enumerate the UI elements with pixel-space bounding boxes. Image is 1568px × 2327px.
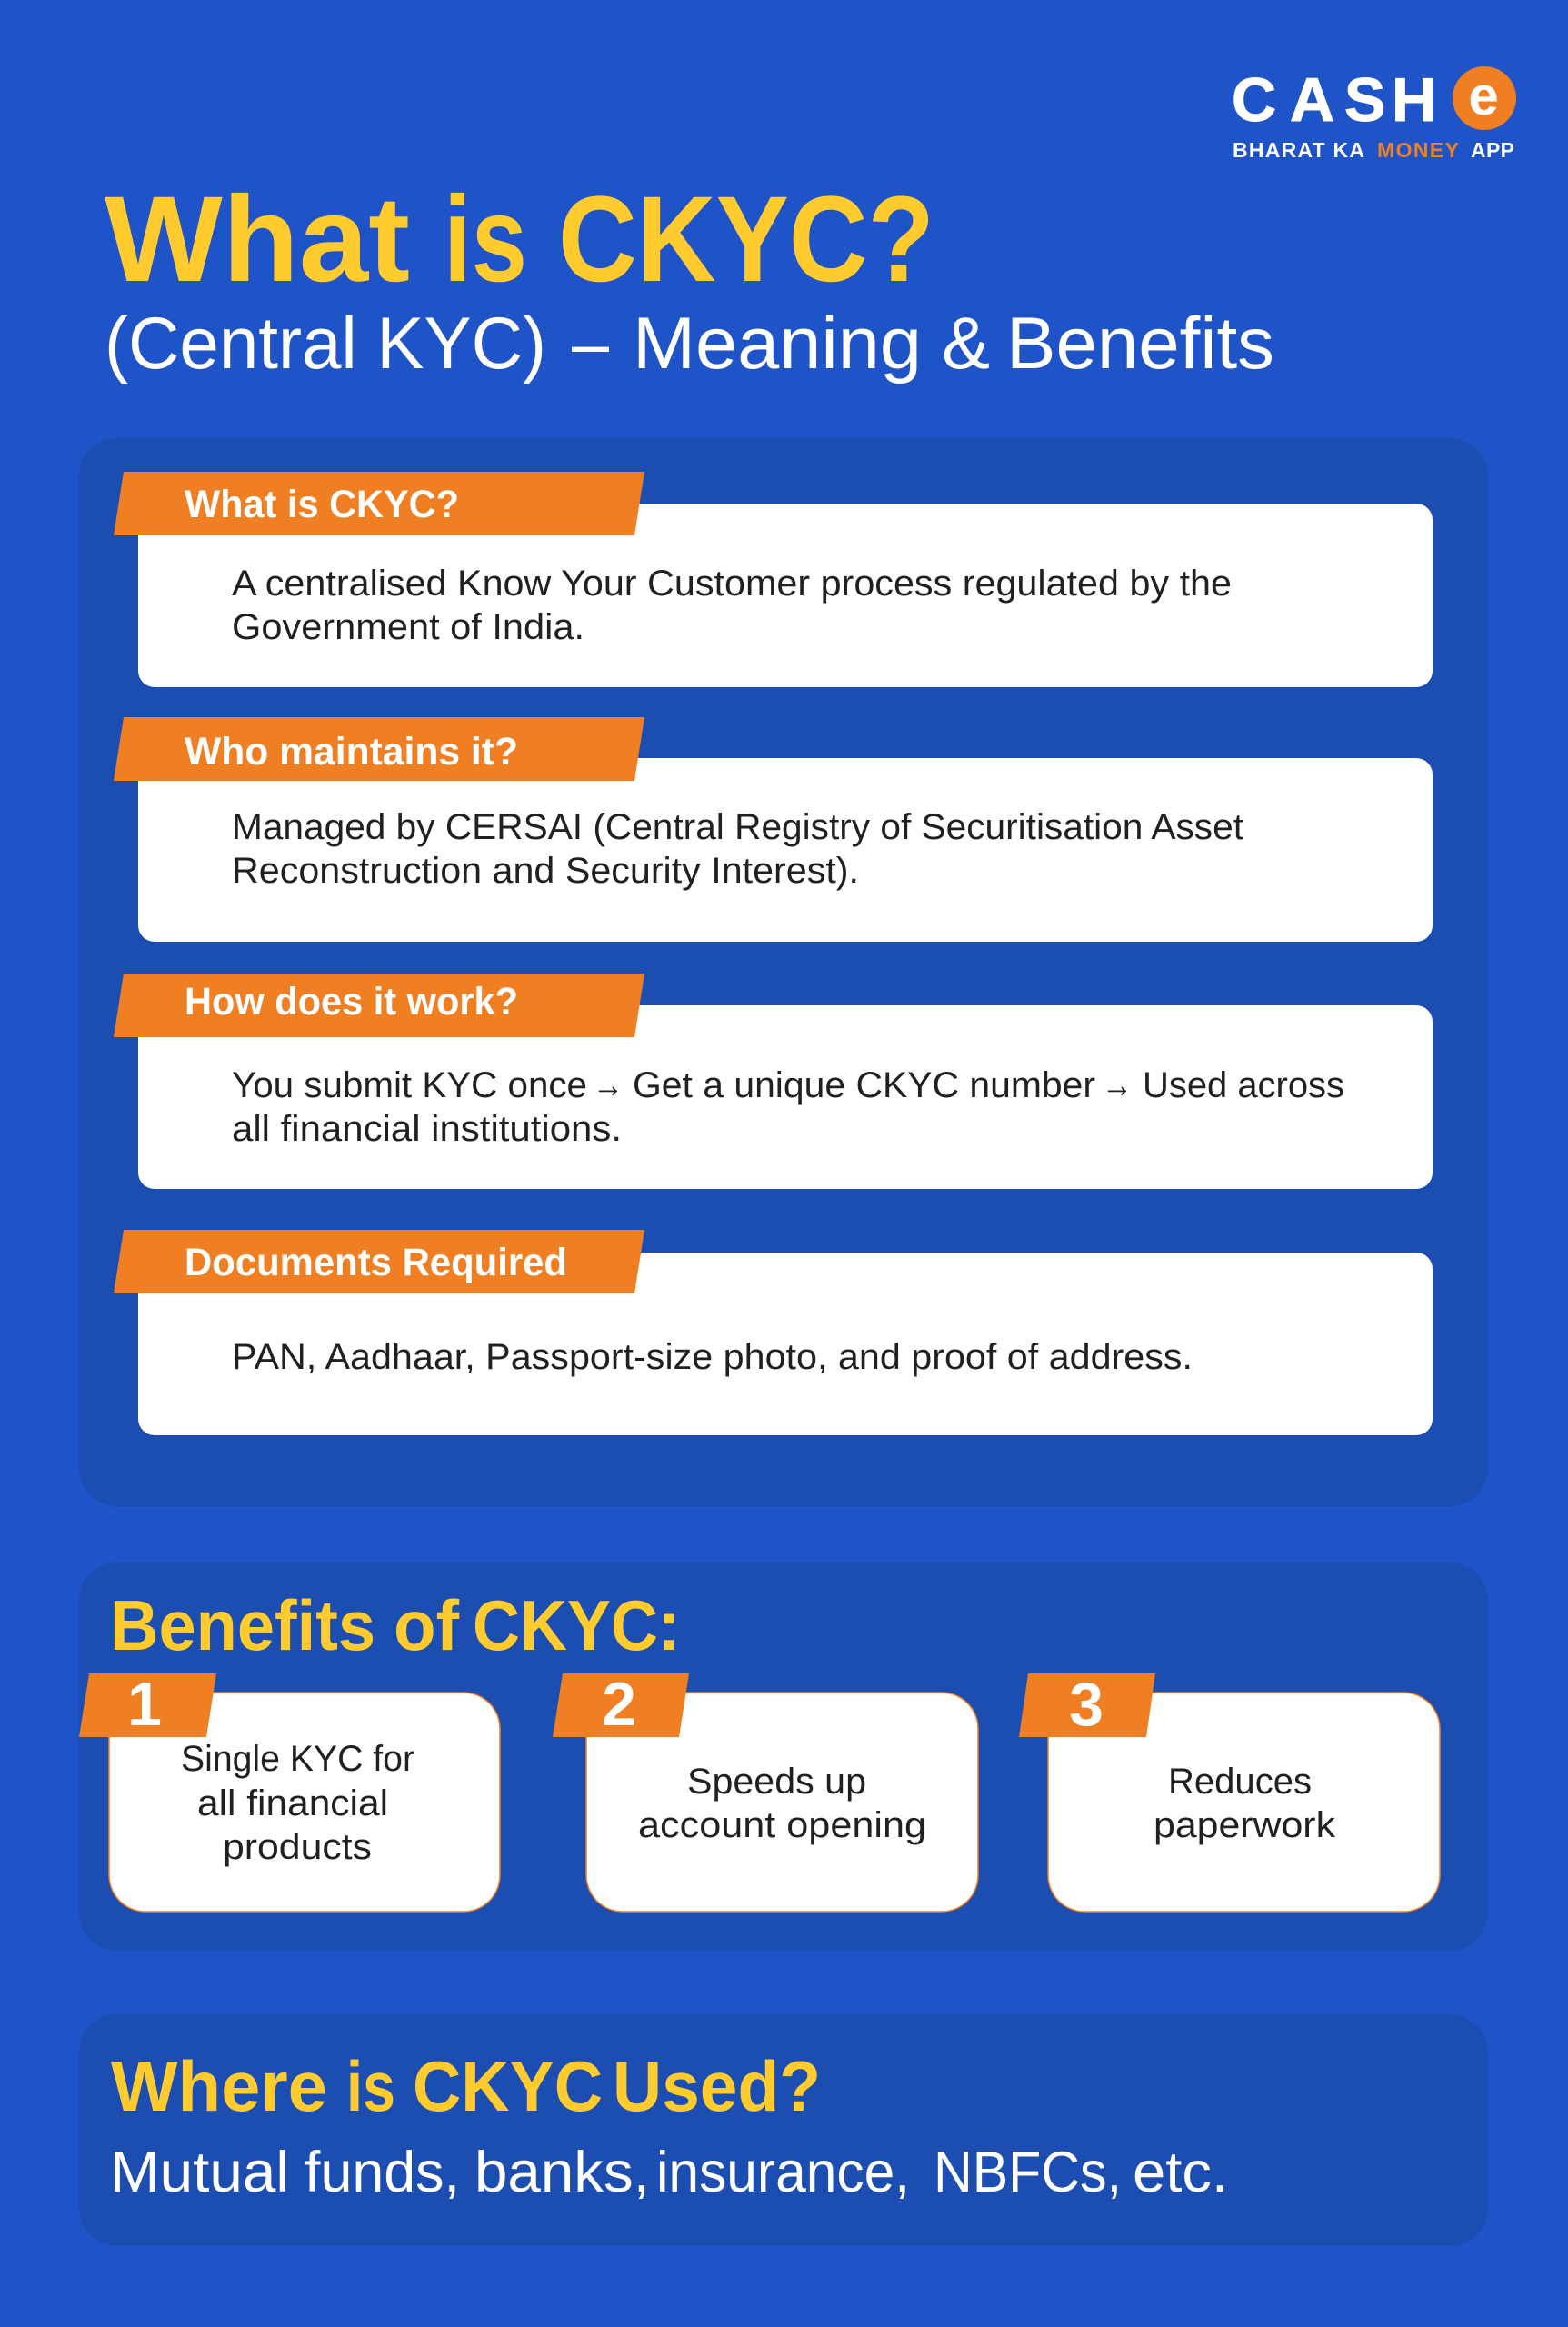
text: what is CKYC bbox=[232, 564, 1232, 647]
heading: where used: CKYC bbox=[413, 2046, 603, 2126]
number 3: 3 bbox=[1069, 1670, 1104, 1739]
heading: how does it work: How does it work? bbox=[185, 980, 518, 1024]
subtitle: – bbox=[572, 303, 610, 385]
heading: benefits: Benefits bbox=[110, 1585, 375, 1665]
heading: what is CKYC: What is CKYC? bbox=[185, 483, 459, 526]
icon: orange circle with e bbox=[1453, 65, 1516, 130]
panel: CKYC explained bbox=[79, 438, 1488, 1506]
text: what is CKYC: A centralised Know Your Customer process regulated by the bbox=[232, 564, 1232, 604]
card: who maintains it bbox=[114, 717, 1433, 942]
text: where used: banks, bbox=[474, 2141, 650, 2204]
heading: documents required: Documents Required bbox=[185, 1241, 567, 1284]
text: how does it work: all financial institutions. bbox=[232, 1109, 622, 1149]
text: benefit 2: Speeds up bbox=[687, 1762, 866, 1802]
text: documents required: PAN, Aadhaar, Passport-size photo, and proof of address. bbox=[232, 1337, 1193, 1377]
text: where used: etc. bbox=[1133, 2141, 1228, 2204]
benefit card 1 bbox=[79, 1670, 500, 1912]
text: how does it work: → bbox=[593, 1065, 624, 1105]
heading: where used bbox=[111, 2046, 821, 2126]
benefit card 3 bbox=[1019, 1670, 1440, 1912]
text: benefit 1: all financial bbox=[197, 1783, 388, 1823]
benefit card 2 bbox=[553, 1670, 978, 1912]
logo tagline: APP bbox=[1471, 138, 1514, 162]
heading: benefits bbox=[110, 1585, 680, 1665]
heading: benefits: CKYC: bbox=[473, 1585, 680, 1665]
subtitle: (Central KYC) bbox=[105, 303, 546, 385]
panel: benefits bbox=[79, 1563, 1488, 1951]
subtitle: Benefits bbox=[1006, 303, 1274, 385]
card: how does it work bbox=[114, 974, 1433, 1189]
logo tagline: MONEY bbox=[1377, 138, 1459, 162]
text: where used: funds, bbox=[305, 2141, 460, 2204]
card: what is CKYC bbox=[114, 472, 1433, 687]
text: who maintains it bbox=[232, 807, 1243, 891]
number 1: 1 bbox=[127, 1670, 162, 1739]
text: benefit 2: account opening bbox=[638, 1805, 926, 1845]
text: where used: Mutual bbox=[110, 2141, 289, 2204]
title bbox=[105, 172, 934, 307]
text: where used: insurance, bbox=[656, 2141, 910, 2204]
icon: orange circle with e: e bbox=[1468, 65, 1499, 126]
text: benefit 2 bbox=[638, 1762, 926, 1845]
text: benefit 3: paperwork bbox=[1154, 1805, 1336, 1845]
text: benefit 1 bbox=[181, 1739, 414, 1867]
logo: CASHe: CASH bbox=[1232, 65, 1436, 135]
heading: benefits: of bbox=[394, 1585, 460, 1665]
subtitle: & bbox=[942, 303, 990, 385]
text: where used: NBFCs, bbox=[934, 2141, 1122, 2204]
text: how does it work: → bbox=[1102, 1065, 1133, 1105]
text: how does it work: Get a unique CKYC number bbox=[633, 1065, 1095, 1105]
logo tagline: BHARAT KA bbox=[1233, 138, 1364, 162]
number 2: 2 bbox=[602, 1670, 636, 1739]
text: how does it work: Used across bbox=[1143, 1065, 1344, 1105]
heading: where used: Where bbox=[111, 2046, 327, 2126]
text: who maintains it: Managed by CERSAI (Central Registry of Securitisation Asset bbox=[232, 807, 1243, 847]
text: how does it work: You submit KYC once bbox=[232, 1065, 587, 1105]
text: what is CKYC: Government of India. bbox=[232, 607, 584, 647]
subtitle bbox=[105, 303, 1274, 385]
text: benefit 3 bbox=[1154, 1762, 1336, 1845]
text: who maintains it: Reconstruction and Security Interest). bbox=[232, 851, 859, 891]
logo tagline bbox=[1233, 138, 1514, 162]
heading: where used: Used? bbox=[613, 2046, 821, 2126]
title: What bbox=[105, 172, 410, 307]
title: CKYC? bbox=[558, 172, 934, 307]
card: documents required bbox=[114, 1230, 1433, 1435]
text: how does it work bbox=[232, 1065, 1344, 1149]
subtitle: Meaning bbox=[633, 303, 922, 385]
text: benefit 3: Reduces bbox=[1168, 1762, 1312, 1802]
text: benefit 1: products bbox=[223, 1827, 372, 1867]
heading: where used: is bbox=[346, 2046, 395, 2126]
text: where used bbox=[110, 2141, 1228, 2204]
panel: where is CKYC used bbox=[79, 2014, 1488, 2246]
logo: CASHe bbox=[1232, 65, 1516, 162]
text: benefit 1: Single KYC for bbox=[181, 1739, 414, 1779]
title: is bbox=[444, 172, 527, 307]
heading: who maintains it: Who maintains it? bbox=[185, 730, 518, 774]
